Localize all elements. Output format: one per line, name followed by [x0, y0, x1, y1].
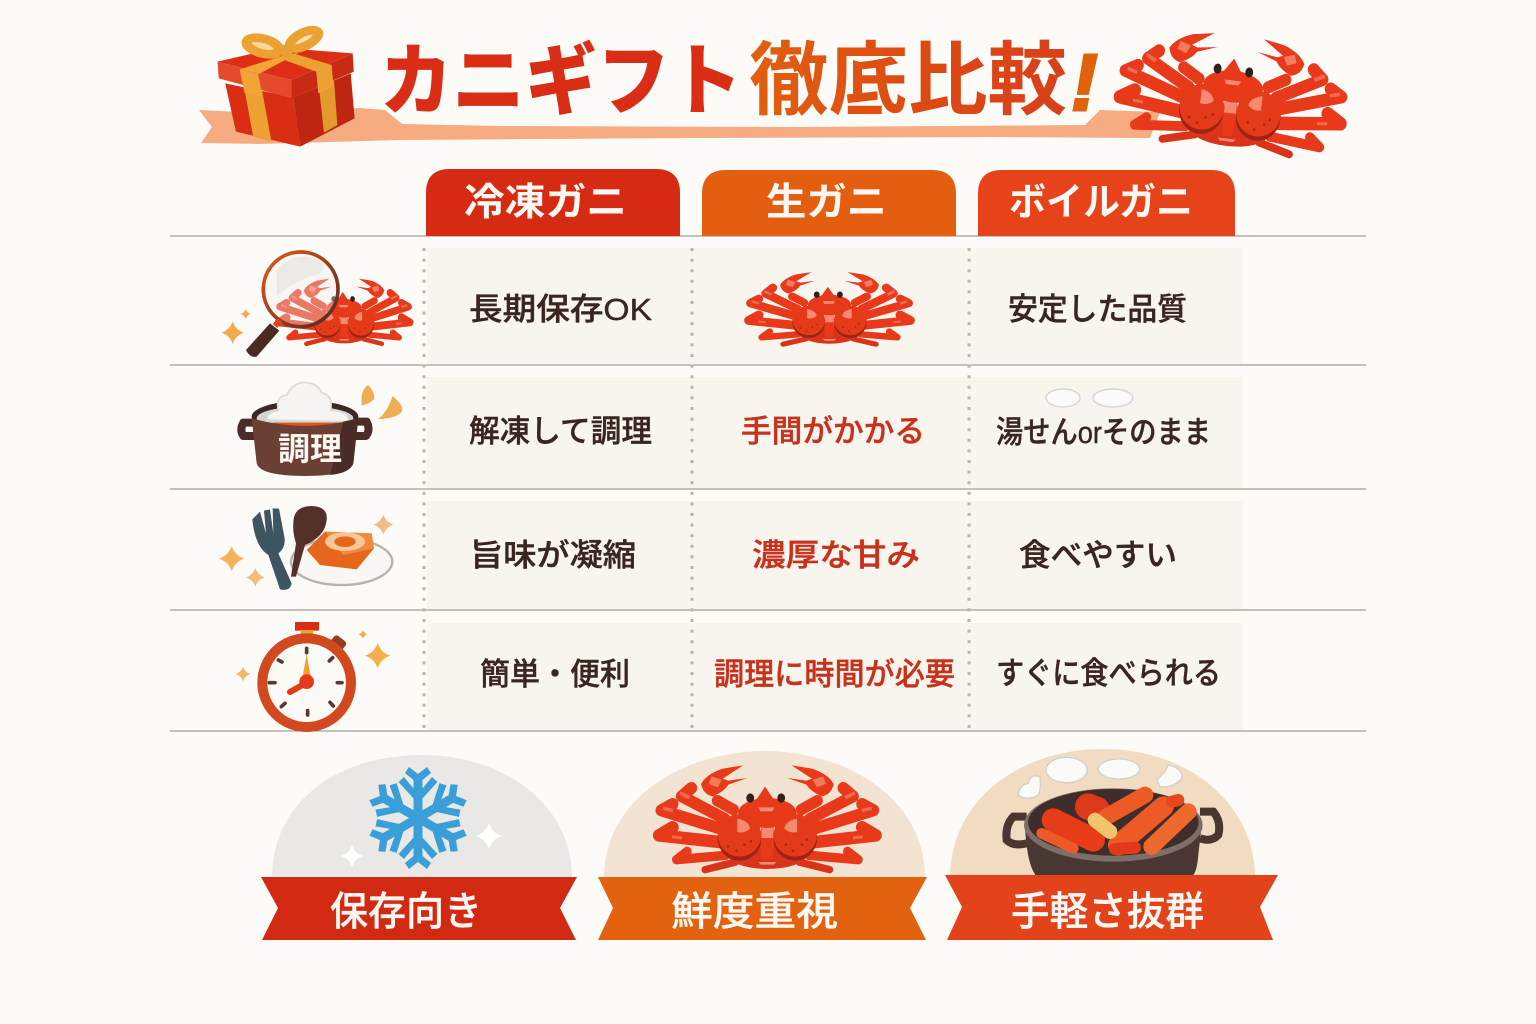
- panel: 保存向き: 保存向き: [330, 890, 482, 934]
- panel: 手軽さ抜群: 手軽さ抜群: [1011, 890, 1204, 934]
- row 3 text: [470, 538, 1177, 573]
- row 1 text: 安定した品質: [1008, 292, 1187, 327]
- table: comparison grid: [170, 169, 1366, 731]
- column header: ボイルガニ: ボイルガニ: [1009, 182, 1193, 224]
- icon: crab: [659, 765, 876, 870]
- row 1 text: 長期保存OK: [469, 292, 652, 327]
- dome: [950, 749, 1255, 878]
- ribbon: [261, 877, 577, 940]
- table cells: [427, 248, 1243, 730]
- ribbon: [598, 877, 927, 940]
- icon: stopwatch: [236, 622, 390, 727]
- row 2 text: 手間がかかる: [741, 414, 925, 449]
- row 4 text: 調理に時間が必要: [714, 657, 955, 692]
- ribbon: [945, 875, 1278, 940]
- row 2 text: [469, 389, 1211, 450]
- title text: !: [1071, 38, 1098, 127]
- title text: カニギフト: [380, 37, 742, 125]
- icon: pot labelled 調理: [241, 383, 402, 476]
- dome: [604, 751, 925, 878]
- icon: gift box: [218, 27, 355, 147]
- column header: ボイルガニ: [978, 170, 1235, 236]
- row 2 text: 解凍して調理: [469, 414, 652, 449]
- icon: snowflake: [364, 767, 472, 869]
- icon: pot labelled 調理: 調理: [278, 431, 342, 467]
- row 1 text: [469, 272, 1187, 344]
- title text: 徹底比較: [749, 36, 1067, 125]
- row 4 text: 簡単・便利: [480, 657, 630, 692]
- column header: 冷凍ガニ: 冷凍ガニ: [464, 182, 627, 224]
- column header: 生ガニ: 生ガニ: [766, 182, 887, 224]
- panel: 手軽さ抜群: [945, 749, 1278, 940]
- panel: 鮮度重視: 鮮度重視: [671, 890, 838, 934]
- panel: 鮮度重視: [598, 751, 927, 940]
- dome: [272, 755, 572, 878]
- column header: 冷凍ガニ: [426, 169, 680, 236]
- icon: fork, spoon and dish: [219, 506, 393, 590]
- title text: [380, 36, 1098, 127]
- row 3 text: 濃厚な甘み: [752, 538, 920, 573]
- row 2 text: 湯せんorそのまま: [996, 415, 1211, 450]
- title banner: [199, 23, 1350, 160]
- icon: title crab: [1116, 23, 1350, 160]
- column header: 生ガニ: [702, 170, 956, 236]
- row 3 text: 旨味が凝縮: [470, 538, 636, 573]
- brush stroke under title: [199, 108, 1160, 144]
- row 4 text: すぐに食べられる: [996, 656, 1221, 691]
- row 4 text: [480, 656, 1221, 692]
- icon: magnifier over crab: [221, 252, 410, 357]
- icon: steam puffs: [1046, 389, 1133, 407]
- panel: 保存向き: [261, 755, 577, 940]
- icon: pot with crab legs: [1006, 757, 1219, 877]
- icon: crab in cell: [749, 272, 910, 344]
- row 3 text: 食べやすい: [1019, 538, 1177, 573]
